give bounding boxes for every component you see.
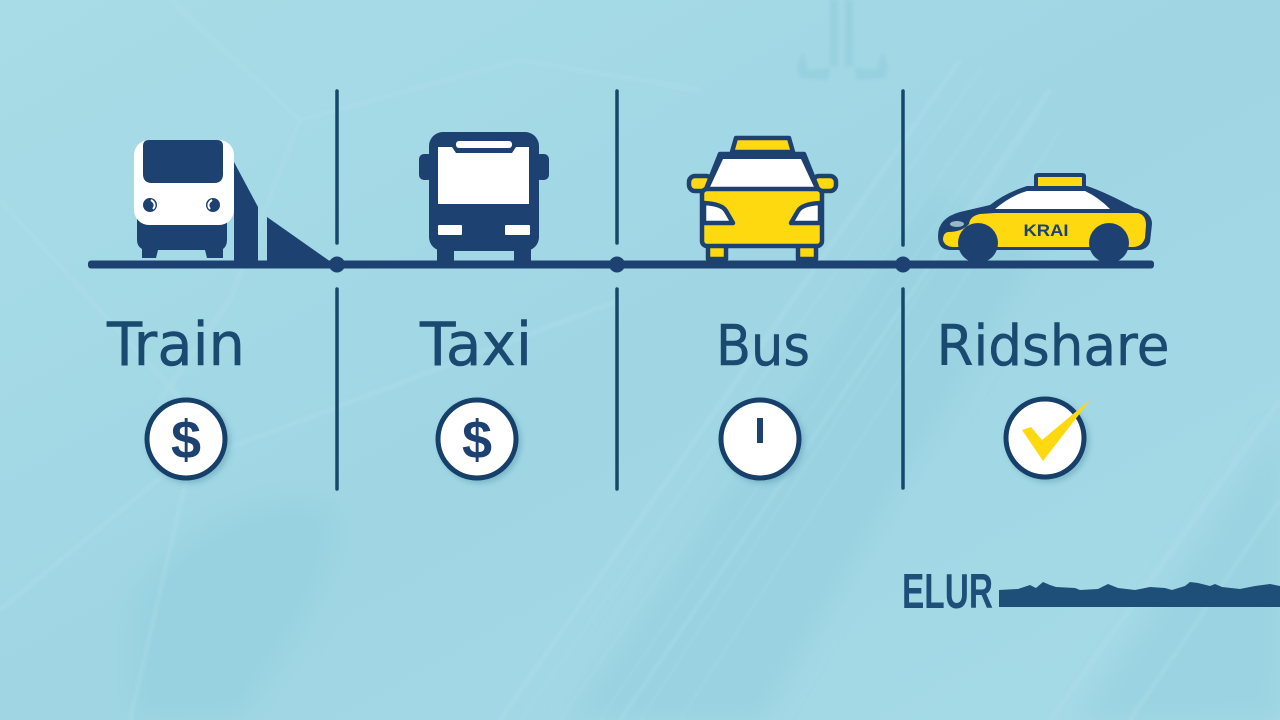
icon: train dollar: $ bbox=[171, 410, 201, 470]
column dividers bbox=[337, 91, 903, 489]
taxi plate text: KRAI bbox=[1024, 221, 1068, 240]
label: Train: Train bbox=[106, 310, 245, 380]
icon: bus bbox=[419, 132, 549, 262]
icon: front taxi bbox=[689, 138, 836, 259]
icon: rideshare check bbox=[1006, 399, 1091, 477]
skyline strip bbox=[999, 582, 1280, 607]
icon: side taxi bbox=[938, 173, 1152, 263]
label: Bus: Bus bbox=[716, 314, 810, 379]
timeline axis bbox=[88, 256, 1154, 272]
icon: taxi dollar: $ bbox=[462, 410, 492, 470]
icon: train dollar bbox=[147, 400, 225, 478]
logo text: ELUR bbox=[902, 565, 993, 619]
label: Rideshare: Ridshare bbox=[936, 314, 1170, 379]
icon: taxi dollar bbox=[438, 400, 516, 478]
label: Taxi: Taxi bbox=[419, 310, 532, 380]
icon: bus clock bbox=[721, 400, 799, 478]
tower watermark bbox=[797, 0, 888, 80]
icon: train bbox=[134, 140, 331, 262]
